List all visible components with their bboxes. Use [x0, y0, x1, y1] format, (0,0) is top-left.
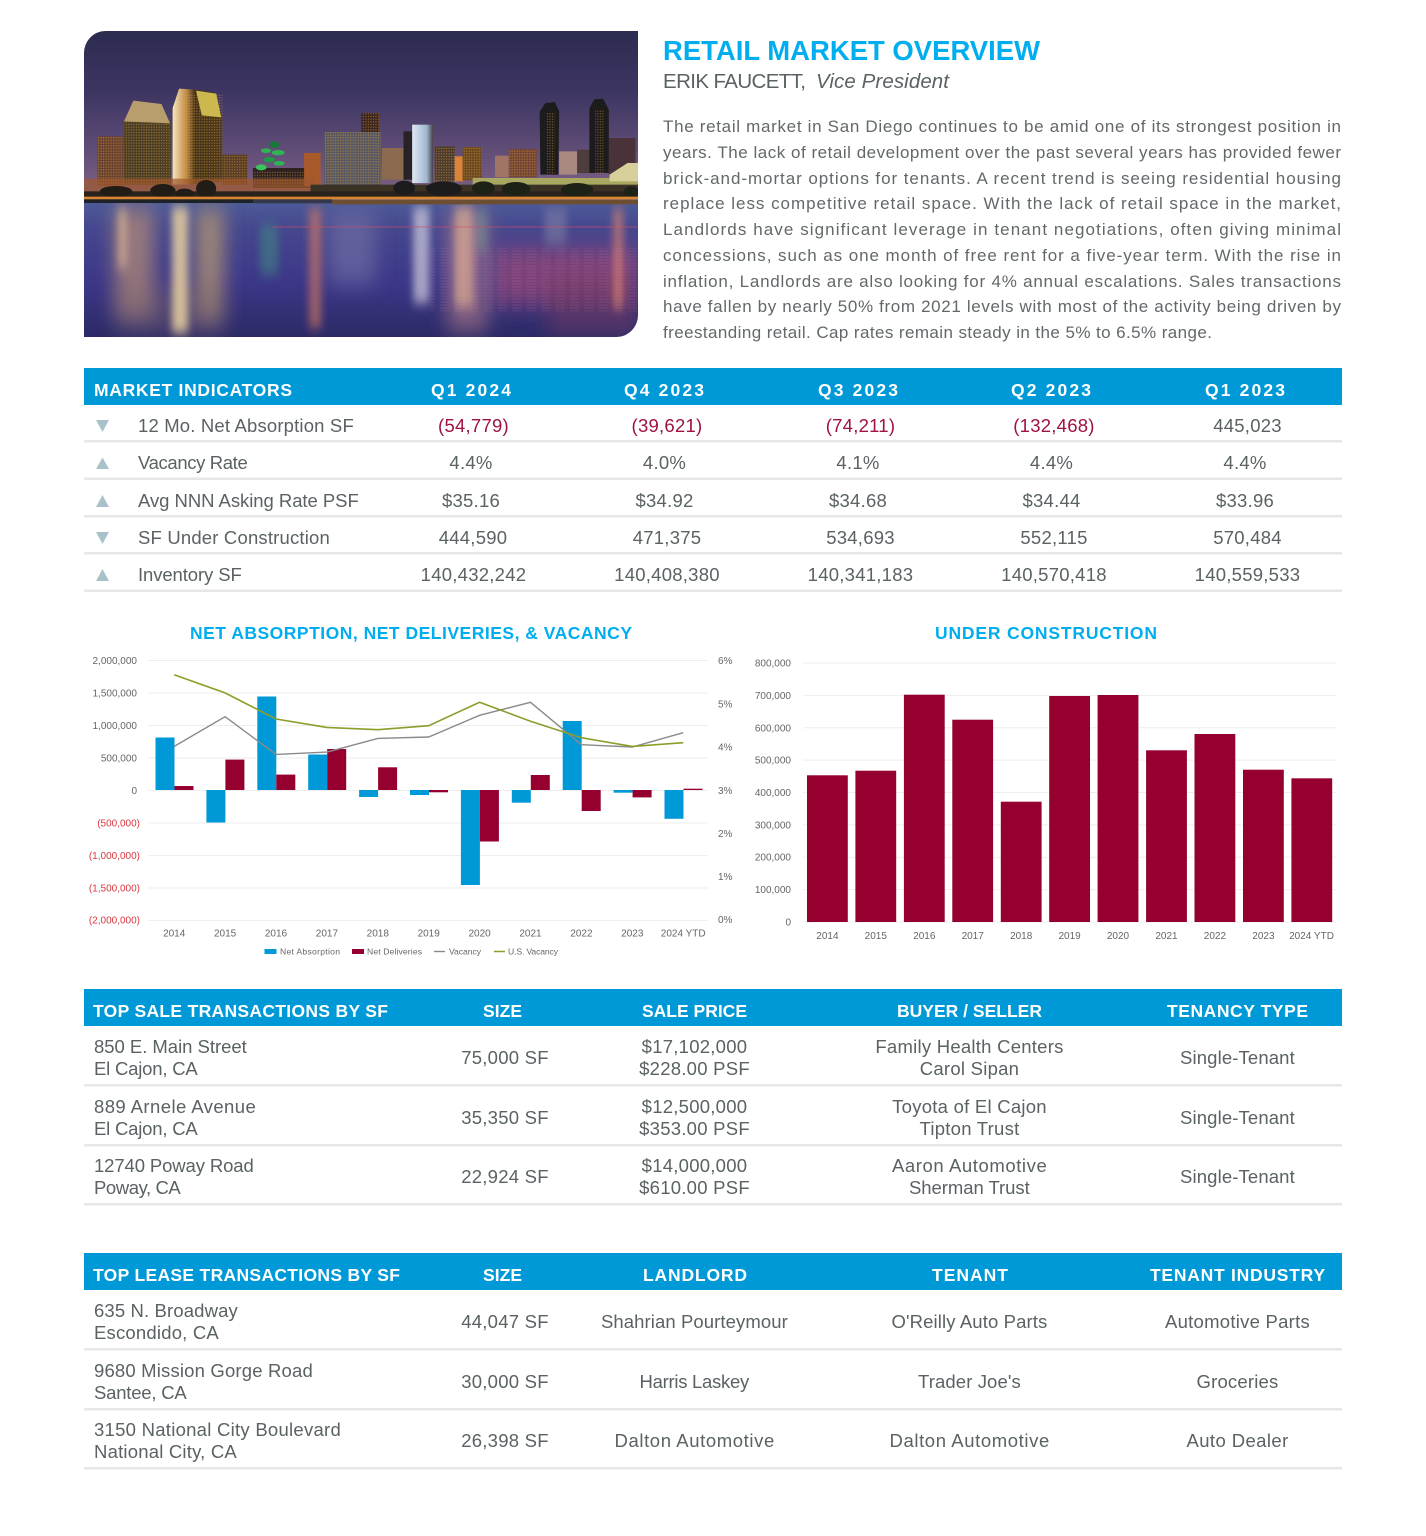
- author line: ERIK FAUCETT,: [663, 70, 806, 93]
- sale table header: TOP SALE TRANSACTIONS BY SF: [93, 1001, 388, 1021]
- row: Avg NNN Asking Rate PSF: Avg NNN Asking Rate PSF: [138, 490, 359, 511]
- lease table header: LANDLORD: [643, 1265, 747, 1285]
- lease row: 635 N. Broadway: Shahrian Pourteymour: [601, 1311, 788, 1332]
- bar chart: under construction: [755, 658, 1336, 942]
- text block: market summary paragraph: brick-and-mortar options for tenants. A recent trend is seeing residential housing: [663, 169, 1341, 188]
- line: U.S. vacancy: [174, 675, 683, 746]
- y axis labels: 200,000: [755, 852, 791, 864]
- text block: market summary paragraph: concessions, such as one month of free rent for a five-year term. With the rise in: [663, 246, 1341, 265]
- text block: market summary paragraph: replace less competitive retail space. With the lack of retail space in the market,: [663, 194, 1341, 213]
- sale table header: SIZE: [483, 1001, 522, 1021]
- right axis labels: 4%: [718, 742, 733, 754]
- row: Inventory SF: 140,570,418: [1001, 564, 1107, 585]
- y axis labels: 700,000: [755, 691, 791, 702]
- sale row: 889 Arnele Avenue: Toyota of El Cajon: [892, 1096, 1047, 1117]
- x axis labels: 2014: [163, 928, 186, 940]
- y axis labels: 300,000: [755, 820, 791, 832]
- row: Vacancy Rate: Vacancy Rate: [138, 452, 248, 473]
- x axis labels: 2022: [570, 928, 593, 940]
- x axis labels: 2024 YTD: [1289, 931, 1334, 942]
- y axis labels: 500,000: [755, 756, 791, 766]
- lease table header: SIZE: [483, 1265, 522, 1285]
- row: SF Under Construction: 570,484: [1213, 527, 1282, 548]
- row: Avg NNN Asking Rate PSF: [84, 490, 1342, 518]
- left axis labels: 500,000: [101, 754, 137, 764]
- lease row: 9680 Mission Gorge Road: Santee, CA: [94, 1382, 187, 1403]
- sale row: 12740 Poway Road: $610.00 PSF: [639, 1177, 750, 1198]
- lease row: 3150 National City Boulevard: 3150 National City Boulevard: [94, 1419, 341, 1440]
- lease row: 635 N. Broadway: [84, 1300, 1342, 1350]
- lease row: 3150 National City Boulevard: 26,398 SF: [461, 1430, 549, 1451]
- x axis labels: [816, 931, 1334, 942]
- right axis labels: 0%: [718, 915, 733, 926]
- y axis labels: [755, 658, 791, 928]
- market indicators header: Q4 2023: [624, 380, 704, 400]
- lease row: 635 N. Broadway: Automotive Parts: [1165, 1311, 1310, 1332]
- sale row: 850 E. Main Street: 850 E. Main Street: [94, 1036, 247, 1057]
- row: SF Under Construction: SF Under Construction: [138, 527, 330, 548]
- row: Inventory SF: 140,341,183: [808, 564, 913, 585]
- x axis labels: 2020: [468, 928, 491, 940]
- lease row: 635 N. Broadway: Escondido, CA: [94, 1322, 219, 1343]
- right axis labels: 5%: [718, 700, 733, 710]
- sale row: 850 E. Main Street: 75,000 SF: [461, 1047, 549, 1068]
- sale row: 889 Arnele Avenue: $12,500,000: [642, 1096, 747, 1117]
- row: SF Under Construction: 552,115: [1020, 527, 1088, 548]
- market indicators header: Q3 2023: [818, 380, 898, 400]
- y axis labels: 0: [785, 918, 791, 928]
- x axis labels: 2019: [1058, 931, 1081, 942]
- left axis labels: 1,500,000: [92, 688, 137, 700]
- lease table header: [84, 1253, 1342, 1290]
- sale row: 889 Arnele Avenue: $353.00 PSF: [639, 1118, 750, 1139]
- x axis labels: 2023: [621, 928, 644, 940]
- row: Inventory SF: [84, 564, 1342, 592]
- row: SF Under Construction: [84, 527, 1342, 554]
- x axis labels: 2023: [1252, 931, 1275, 942]
- author line: [663, 70, 950, 93]
- sale row: 850 E. Main Street: Carol Sipan: [920, 1058, 1019, 1079]
- row: Vacancy Rate: [84, 452, 1342, 480]
- lease table header: TENANT INDUSTRY: [1150, 1265, 1325, 1285]
- y axis labels: 800,000: [755, 658, 791, 670]
- text block: market summary paragraph: The retail market in San Diego continues to be amid one of its strongest position in: [663, 117, 1341, 136]
- author line: Vice President: [816, 70, 950, 93]
- lease row: 9680 Mission Gorge Road: 9680 Mission Gorge Road: [94, 1360, 313, 1381]
- bars: net deliveries: [174, 749, 702, 842]
- right axis labels: [718, 656, 733, 926]
- right axis labels: 2%: [718, 829, 733, 840]
- row: Avg NNN Asking Rate PSF: $34.44: [1022, 490, 1081, 511]
- row: Vacancy Rate: 4.4%: [1223, 452, 1267, 473]
- sale row: 889 Arnele Avenue: El Cajon, CA: [94, 1118, 198, 1139]
- lease row: 635 N. Broadway: O'Reilly Auto Parts: [892, 1311, 1048, 1332]
- lease row: 3150 National City Boulevard: National City, CA: [94, 1441, 237, 1462]
- row: Vacancy Rate: 4.4%: [1030, 452, 1073, 473]
- row: Inventory SF: 140,432,242: [421, 564, 526, 585]
- x axis labels: 2018: [1010, 931, 1033, 942]
- x axis labels: 2021: [1155, 931, 1178, 942]
- row: Avg NNN Asking Rate PSF: $35.16: [442, 490, 500, 511]
- lease table header: TOP LEASE TRANSACTIONS BY SF: [93, 1265, 400, 1285]
- left axis labels: 2,000,000: [92, 656, 137, 667]
- photo: San Diego skyline at dusk: [84, 31, 638, 337]
- sale row: 12740 Poway Road: Aaron Automotive: [892, 1155, 1047, 1176]
- y axis labels: 600,000: [755, 724, 791, 734]
- lease row: 3150 National City Boulevard: [84, 1419, 1342, 1470]
- x axis labels: [163, 928, 706, 940]
- legend: Vacancy: [449, 946, 482, 956]
- text block: market summary paragraph: years. The lack of retail development over the past several years has provided fewer: [663, 143, 1341, 162]
- lease row: 635 N. Broadway: 635 N. Broadway: [94, 1300, 238, 1321]
- y axis labels: 400,000: [755, 788, 791, 799]
- sale row: 12740 Poway Road: 12740 Poway Road: [94, 1155, 254, 1176]
- row: Vacancy Rate: 4.1%: [836, 452, 880, 473]
- title: RETAIL MARKET OVERVIEW: [663, 35, 1040, 66]
- sale row: 12740 Poway Road: Sherman Trust: [909, 1177, 1030, 1198]
- sale row: 889 Arnele Avenue: 889 Arnele Avenue: [94, 1096, 256, 1117]
- legend: Net Absorption: [280, 946, 340, 956]
- sale table header: BUYER / SELLER: [897, 1001, 1042, 1021]
- right axis labels: 1%: [718, 872, 733, 883]
- text block: market summary paragraph: inflation, Landlords are also looking for 4% annual escalations. Sales transactions: [663, 272, 1341, 291]
- row: Inventory SF: 140,408,380: [614, 564, 720, 585]
- lease row: 3150 National City Boulevard: Dalton Automotive: [890, 1430, 1050, 1451]
- sale row: 12740 Poway Road: 22,924 SF: [461, 1166, 549, 1187]
- sale row: 889 Arnele Avenue: Tipton Trust: [920, 1118, 1020, 1139]
- legend: Net Deliveries: [367, 946, 422, 956]
- row: 12 Mo. Net Absorption SF: [84, 415, 1342, 442]
- left axis labels: 1,000,000: [92, 721, 137, 732]
- text block: market summary paragraph: freestanding retail. Cap rates remain steady in the 5% to 6.5% range.: [663, 323, 1212, 342]
- left axis labels: (2,000,000): [89, 916, 140, 926]
- lease row: 9680 Mission Gorge Road: Trader Joe's: [918, 1371, 1021, 1392]
- bars: net absorption: [156, 696, 684, 885]
- sale row: 12740 Poway Road: Poway, CA: [94, 1177, 181, 1198]
- left axis labels: (500,000): [97, 818, 140, 830]
- sale table header: TENANCY TYPE: [1167, 1001, 1308, 1021]
- left axis labels: (1,500,000): [89, 884, 140, 894]
- x axis labels: 2015: [865, 931, 887, 942]
- text block: market summary paragraph: [663, 117, 1342, 342]
- x axis labels: 2018: [367, 928, 389, 940]
- sale row: 850 E. Main Street: $228.00 PSF: [639, 1058, 750, 1079]
- lease table header: TENANT: [932, 1265, 1008, 1285]
- row: 12 Mo. Net Absorption SF: 445,023: [1213, 415, 1282, 436]
- left axis labels: 0: [131, 786, 137, 797]
- market indicators header: MARKET INDICATORS: [94, 380, 292, 400]
- left axis labels: [89, 656, 140, 926]
- sale table header: [84, 989, 1342, 1026]
- row: Inventory SF: Inventory SF: [138, 564, 242, 585]
- chart heading: under construction: UNDER CONSTRUCTION: [935, 623, 1157, 643]
- row: SF Under Construction: 471,375: [633, 527, 701, 548]
- x axis labels: 2016: [913, 931, 936, 942]
- row: 12 Mo. Net Absorption SF: (132,468): [1013, 415, 1095, 436]
- lease row: 9680 Mission Gorge Road: 30,000 SF: [461, 1371, 549, 1392]
- row: Avg NNN Asking Rate PSF: $34.92: [635, 490, 694, 511]
- x axis labels: 2016: [265, 928, 288, 940]
- market indicators header: Q1 2024: [431, 380, 511, 400]
- text block: market summary paragraph: Landlords have significant leverage in tenant negotiations, often giving minimal: [663, 220, 1341, 239]
- sale row: 12740 Poway Road: [84, 1155, 1342, 1206]
- row: SF Under Construction: 444,590: [439, 527, 507, 548]
- sale table header: SALE PRICE: [642, 1001, 747, 1021]
- x axis labels: 2017: [316, 928, 338, 940]
- row: Vacancy Rate: 4.0%: [643, 452, 686, 473]
- sale row: 889 Arnele Avenue: 35,350 SF: [461, 1107, 549, 1128]
- table: market indicators: [84, 368, 1342, 592]
- lease row: 3150 National City Boulevard: Auto Dealer: [1186, 1430, 1288, 1451]
- sale row: 850 E. Main Street: Single-Tenant: [1180, 1047, 1295, 1068]
- row: SF Under Construction: 534,693: [826, 527, 895, 548]
- legend: [264, 946, 559, 956]
- lease row: 635 N. Broadway: 44,047 SF: [461, 1311, 549, 1332]
- sale row: 889 Arnele Avenue: [84, 1096, 1342, 1146]
- x axis labels: 2014: [816, 931, 839, 942]
- lease row: 3150 National City Boulevard: Dalton Automotive: [614, 1430, 774, 1451]
- table: top sale transactions: [84, 989, 1342, 1206]
- row: 12 Mo. Net Absorption SF: (54,779): [438, 415, 509, 436]
- chart heading: net absorption: NET ABSORPTION, NET DELIVERIES, & VACANCY: [190, 623, 632, 643]
- line: vacancy: [174, 702, 683, 754]
- x axis labels: 2021: [519, 928, 542, 940]
- row: Vacancy Rate: 4.4%: [449, 452, 493, 473]
- lease row: 9680 Mission Gorge Road: Harris Laskey: [640, 1371, 750, 1392]
- sale row: 12740 Poway Road: Single-Tenant: [1180, 1166, 1295, 1187]
- sale row: 850 E. Main Street: $17,102,000: [642, 1036, 747, 1057]
- row: 12 Mo. Net Absorption SF: (39,621): [632, 415, 702, 436]
- sale row: 850 E. Main Street: El Cajon, CA: [94, 1058, 198, 1079]
- sale row: 850 E. Main Street: [84, 1036, 1342, 1086]
- right axis labels: 3%: [718, 786, 733, 797]
- sale row: 889 Arnele Avenue: Single-Tenant: [1180, 1107, 1295, 1128]
- row: Inventory SF: 140,559,533: [1195, 564, 1300, 585]
- x axis labels: 2015: [214, 928, 237, 940]
- combo chart: net absorption, net deliveries, vacancy: [89, 656, 733, 956]
- lease row: 9680 Mission Gorge Road: Groceries: [1196, 1371, 1278, 1392]
- bars: under construction by year: [807, 695, 1332, 922]
- market indicators header: Q1 2023: [1205, 380, 1285, 400]
- x axis labels: 2019: [418, 928, 440, 940]
- left axis labels: (1,000,000): [89, 851, 140, 862]
- sale row: 850 E. Main Street: Family Health Centers: [875, 1036, 1064, 1057]
- text block: market summary paragraph: have fallen by nearly 50% from 2021 levels with most of the activity being driven by: [663, 297, 1342, 316]
- market indicators header: [84, 368, 1342, 405]
- sale row: 12740 Poway Road: $14,000,000: [642, 1155, 747, 1176]
- market indicators header: Q2 2023: [1011, 380, 1091, 400]
- row: Avg NNN Asking Rate PSF: $34.68: [829, 490, 887, 511]
- row: 12 Mo. Net Absorption SF: 12 Mo. Net Absorption SF: [138, 415, 354, 436]
- right axis labels: 6%: [718, 656, 733, 667]
- row: Avg NNN Asking Rate PSF: $33.96: [1216, 490, 1274, 511]
- legend: U.S. Vacancy: [508, 946, 559, 956]
- x axis labels: 2017: [962, 931, 984, 942]
- lease row: 9680 Mission Gorge Road: [84, 1360, 1342, 1410]
- row: 12 Mo. Net Absorption SF: (74,211): [826, 415, 895, 436]
- x axis labels: 2022: [1204, 931, 1226, 942]
- y axis labels: 100,000: [755, 885, 791, 896]
- table: top lease transactions: [84, 1253, 1342, 1470]
- x axis labels: 2020: [1107, 931, 1130, 942]
- x axis labels: 2024 YTD: [661, 928, 706, 940]
